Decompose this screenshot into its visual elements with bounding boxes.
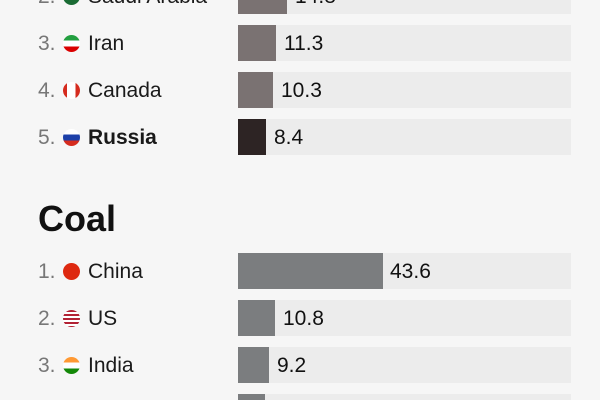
row: Russia: 5.: [38, 126, 56, 149]
row: US: [38, 300, 571, 336]
row: Iran: Iran: [88, 32, 124, 55]
row: China: China: [88, 260, 143, 283]
icon: Russia flag: [63, 129, 80, 146]
row: Canada: [38, 72, 571, 108]
row: India: India: [88, 354, 134, 377]
row: partial next: [238, 394, 571, 400]
row: China: 1.: [38, 260, 56, 283]
row: India: 9.2: [277, 354, 306, 377]
icon: US flag: [63, 310, 80, 327]
row: China: 43.6: [390, 260, 431, 283]
row: Iran: [38, 25, 571, 61]
row: Canada: 10.3: [281, 79, 322, 102]
icon: Canada flag: [63, 82, 80, 99]
row: China: [38, 253, 571, 289]
row: US: 10.8: [283, 307, 324, 330]
row: US: 2.: [38, 307, 56, 330]
row: US: US: [88, 307, 117, 330]
row: Russia: 8.4: [274, 126, 303, 149]
row: Russia: [38, 119, 571, 155]
icon: China flag: [63, 263, 80, 280]
icon: India flag: [63, 357, 80, 374]
row: India: 3.: [38, 354, 56, 377]
icon: Saudi flag: [63, 0, 80, 5]
icon: Iran flag: [63, 35, 80, 52]
row: Saudi Arabia: [38, 0, 571, 14]
row: Iran: 3.: [38, 32, 56, 55]
row: Iran: 11.3: [284, 32, 323, 55]
row: Russia: Russia: [88, 126, 157, 149]
row: India: [38, 347, 571, 383]
row: Canada: Canada: [88, 79, 162, 102]
heading: Coal: Coal: [38, 198, 116, 239]
row: Canada: 4.: [38, 79, 56, 102]
